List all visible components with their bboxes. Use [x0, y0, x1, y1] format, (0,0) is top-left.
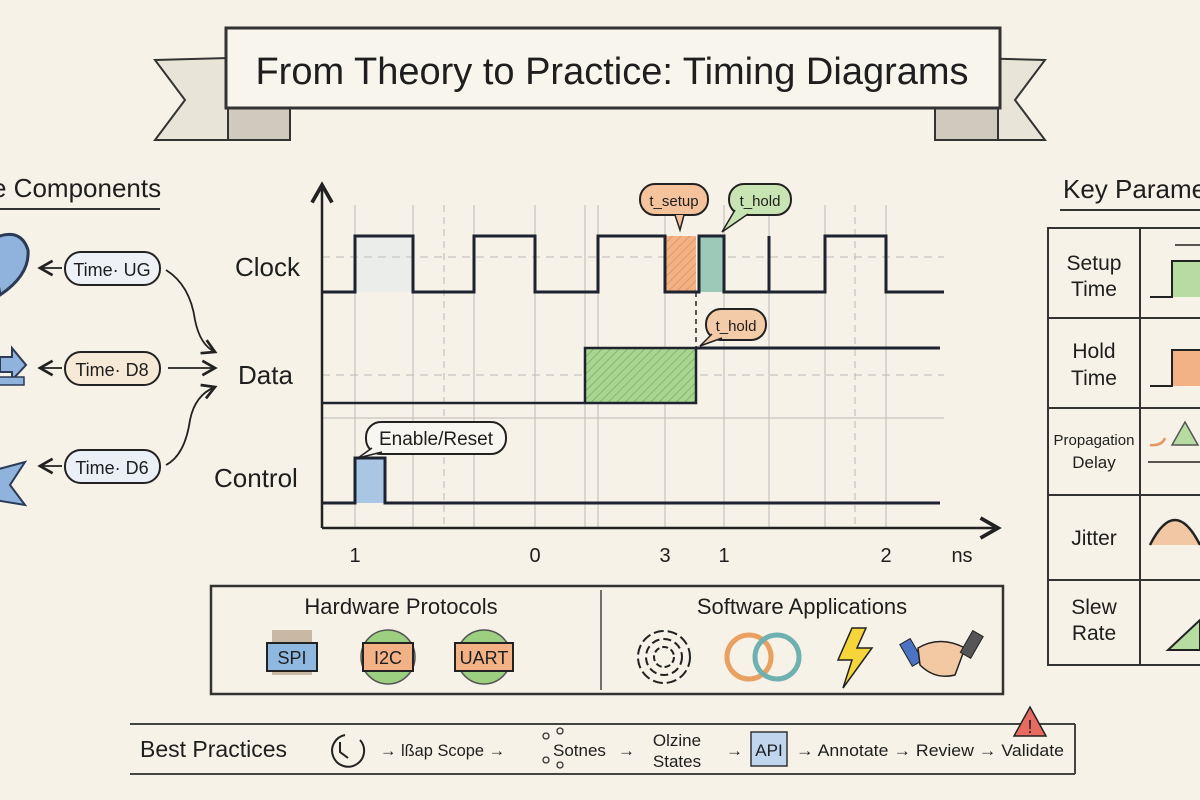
- icon: I2C: [361, 630, 415, 684]
- control wave: [322, 458, 940, 503]
- panel: key parameters: Time: [1071, 278, 1117, 301]
- panel: key parameters: Propagation: [1054, 432, 1134, 449]
- icon: arrow: [0, 348, 26, 380]
- icon: SPI: SPI: [277, 648, 307, 668]
- tick labels: [349, 545, 973, 567]
- data wave: [322, 348, 696, 403]
- heading: hardware: Hardware Protocols: [304, 594, 498, 619]
- panel: key parameters: Hold: [1072, 340, 1116, 363]
- icon: heart: [0, 234, 28, 295]
- tick labels: 0: [529, 545, 541, 567]
- icon: vortex: [638, 631, 690, 683]
- callout: t_hold top: t_hold: [740, 193, 780, 210]
- signal labels: Data: [238, 360, 293, 390]
- steps: Olzine: [653, 731, 701, 750]
- tick labels: 1: [349, 545, 361, 567]
- panel: key parameters: [1048, 174, 1200, 665]
- pill 1: Time· UG: [73, 260, 151, 280]
- icon: bowtie: [0, 462, 25, 505]
- panel: key parameters: Rate: [1072, 622, 1116, 645]
- icon: UART: [455, 630, 513, 684]
- steps: → Annotate → Review → Validate: [796, 741, 1064, 760]
- pill 2: [40, 352, 160, 385]
- clock wave: [322, 236, 944, 292]
- axes: [321, 185, 323, 528]
- pill 3: Time· D6: [75, 458, 149, 478]
- tick labels: 2: [880, 545, 892, 567]
- steps: [380, 728, 1064, 771]
- panel: key parameters: Setup: [1067, 252, 1121, 275]
- callout: Enable/Reset: [358, 422, 506, 458]
- tick labels: 1: [718, 545, 730, 567]
- arrows to data: [166, 270, 215, 352]
- callout: t_setup: t_setup: [649, 193, 699, 210]
- icon: I2C: I2C: [374, 648, 402, 668]
- panel: applications: [211, 586, 1003, 694]
- callout: Enable/Reset: Enable/Reset: [379, 429, 494, 450]
- panel: key parameters: Delay: [1072, 453, 1116, 472]
- steps: States: [653, 752, 701, 771]
- pill 2: Time· D8: [75, 360, 149, 380]
- signal labels: Clock: [235, 252, 301, 282]
- steps: →: [726, 741, 743, 760]
- icon: handshake: [900, 631, 983, 676]
- panel: key parameters: Time: [1071, 367, 1117, 390]
- icon: UART: UART: [460, 648, 508, 668]
- panel: components: [0, 173, 215, 505]
- signal labels: Control: [214, 463, 298, 493]
- icon: warning: [1014, 707, 1046, 737]
- icon: lightning: [838, 628, 872, 688]
- steps: Sotnes: [553, 741, 606, 760]
- callout: t_hold top: [722, 184, 791, 232]
- tick labels: 3: [659, 545, 671, 567]
- pill 3: [40, 450, 160, 483]
- title: From Theory to Practice: Timing Diagrams: [255, 51, 969, 93]
- icon: clock: [332, 735, 364, 767]
- chart: timing diagram: [322, 184, 998, 567]
- pill 1: [40, 252, 160, 285]
- steps: API: [755, 741, 783, 760]
- panel: best practices: [130, 707, 1075, 774]
- setup/hold fills: [665, 236, 696, 292]
- steps: → lßap Scope →: [380, 741, 505, 760]
- tick labels: ns: [951, 545, 973, 567]
- heading: best practices: Best Practices: [140, 736, 287, 762]
- panel: key parameters: Jitter: [1071, 527, 1117, 550]
- callout: t_setup: [640, 184, 708, 230]
- steps: →: [618, 741, 635, 760]
- mini charts: [1175, 244, 1200, 246]
- panel: key parameters: Slew: [1071, 596, 1118, 619]
- icon: rings: [727, 635, 799, 679]
- callout: t_hold data: t_hold: [716, 318, 756, 335]
- icon: warning: !: [1027, 717, 1033, 737]
- icon: SPI: [267, 630, 317, 675]
- title banner: [155, 28, 1045, 140]
- heading: software: Software Applications: [697, 594, 907, 619]
- signal labels: [214, 252, 301, 493]
- callout: t_hold data: [700, 309, 766, 346]
